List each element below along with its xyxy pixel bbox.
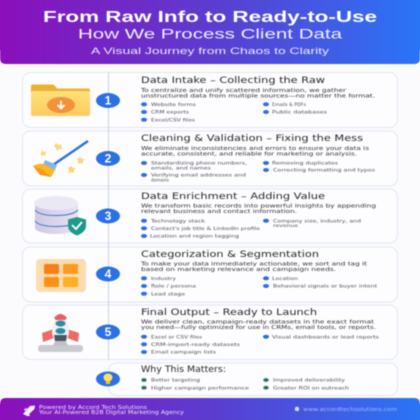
icon: orange grid tile	[36, 259, 86, 292]
bullet list: Contact's job title & LinkedIn profile	[151, 226, 260, 232]
description	[140, 88, 375, 100]
panel: why this matters	[108, 363, 398, 396]
panel: step 5 final output	[22, 305, 398, 360]
header banner	[0, 0, 420, 64]
description: you need—fully optimized for use in CRMs, email tools, or reports.	[141, 325, 376, 331]
heading: Why This Matters:	[141, 365, 226, 375]
bullet list	[141, 160, 376, 183]
bullet list: Emails & PDFs	[272, 102, 307, 108]
description: To make your data immediately actionable, we sort and tag it	[140, 262, 367, 268]
description: To centralize and unify scattered information, we gather	[140, 88, 347, 94]
benefit list: Better targeting	[151, 378, 200, 384]
bullet list: Visual dashboards or lead reports	[272, 334, 380, 340]
icon: light bulb	[96, 372, 120, 386]
step number 3	[96, 208, 120, 224]
description: We eliminate inconsistencies and errors to ensure your data is	[141, 146, 369, 152]
step number 5: 5	[105, 325, 112, 339]
bullet list: emails, and names	[151, 165, 212, 171]
bullet list	[141, 276, 377, 297]
company credit	[38, 405, 184, 416]
description	[141, 146, 369, 158]
description: accurate, consistent, and reliable for marketing or analysis.	[141, 152, 357, 158]
subtitle: How We Process Client Data	[78, 26, 342, 42]
icon: database with shield	[34, 196, 86, 236]
bullet list: Website forms	[151, 102, 197, 108]
panel: step 2 cleaning	[22, 131, 398, 186]
heading: Final Output – Ready to Launch	[141, 308, 317, 318]
heading: Cleaning & Validation – Fixing the Mess	[141, 134, 363, 144]
icon: footer rocket	[23, 406, 35, 416]
bullet list: Technology stack	[150, 218, 205, 224]
footer	[0, 398, 420, 420]
bullet list: Public databases	[272, 110, 328, 116]
tagline: A Visual Journey from Chaos to Clarity	[91, 46, 329, 57]
title: From Raw Info to Ready-to-Use	[43, 9, 377, 26]
benefit list: Greater ROI on outreach	[273, 385, 349, 391]
bullet list: domains	[151, 177, 170, 183]
bullet list: CRM exports	[151, 110, 190, 116]
bullet list: Lead stage	[151, 291, 185, 297]
step number 2	[96, 151, 120, 166]
bullet list	[141, 334, 380, 356]
bullet list: Correcting formatting and typos	[273, 168, 376, 174]
icon: folder with download arrow	[31, 84, 90, 116]
panel: step 4 categorization	[22, 247, 398, 302]
bullet list: Verifying email addresses and	[151, 172, 246, 178]
heading: Categorization & Segmentation	[141, 250, 319, 260]
bullet list: Location and region tagging	[150, 234, 239, 240]
icon: rocket	[38, 313, 83, 352]
bullet list: Industry	[151, 276, 176, 282]
step number 5	[96, 324, 120, 340]
bullet list: Behavioral signals or buyer intent	[273, 284, 377, 290]
bullet list: Location	[272, 276, 298, 282]
heading: Data Intake – Collecting the Raw	[141, 76, 325, 86]
description	[141, 320, 376, 331]
description: We deliver clean, campaign-ready datasets in the exact format	[141, 320, 374, 326]
company credit: Powered by Accord Tech Solutions	[39, 405, 148, 411]
heading: Data Enrichment – Adding Value	[141, 192, 326, 202]
benefit list: Higher campaign performance	[151, 385, 249, 391]
bullet list: CRM-import-ready datasets	[151, 342, 241, 348]
bullet list: Excel or CSV files	[151, 334, 203, 340]
bullet list	[141, 102, 328, 123]
bullet list: Role / persona	[151, 284, 196, 290]
company credit: Your AI-Powered B2B Digital Marketing Agency	[38, 410, 184, 416]
bullet list: Standardizing phone numbers,	[151, 160, 248, 166]
timeline spine	[108, 72, 110, 360]
bullet list	[141, 218, 361, 240]
panel: step 1 data intake	[22, 72, 398, 128]
step number 3: 3	[105, 209, 112, 223]
bullet list: Company size, industry, and	[273, 218, 361, 224]
benefit list: Improved deliverability	[273, 378, 345, 384]
panel: step 3 enrichment	[22, 189, 398, 243]
description: We transform basic records into powerful insights by appending	[141, 204, 376, 210]
description	[141, 204, 376, 215]
step number 1: 1	[105, 94, 112, 108]
bullet list: Removing duplicates	[272, 160, 339, 166]
step number 4: 4	[105, 267, 112, 281]
bullet list: Email campaign lists	[151, 350, 217, 356]
description	[140, 262, 367, 273]
icon: broom with sparkles	[33, 141, 88, 177]
description: relevant business and contact information.	[141, 209, 297, 215]
website: www.accordtechsolutions.com	[303, 407, 397, 413]
step number 4	[96, 266, 120, 282]
bullet list: Excel/CSV files	[151, 117, 196, 123]
step number 1	[96, 93, 120, 108]
description: unstructured data from multiple sources—no matter the format.	[141, 94, 375, 100]
step number 2: 2	[105, 152, 112, 166]
description: based on marketing relevance and campaign needs.	[141, 267, 336, 273]
benefit list	[142, 378, 349, 391]
bullet list: revenue	[273, 223, 298, 229]
